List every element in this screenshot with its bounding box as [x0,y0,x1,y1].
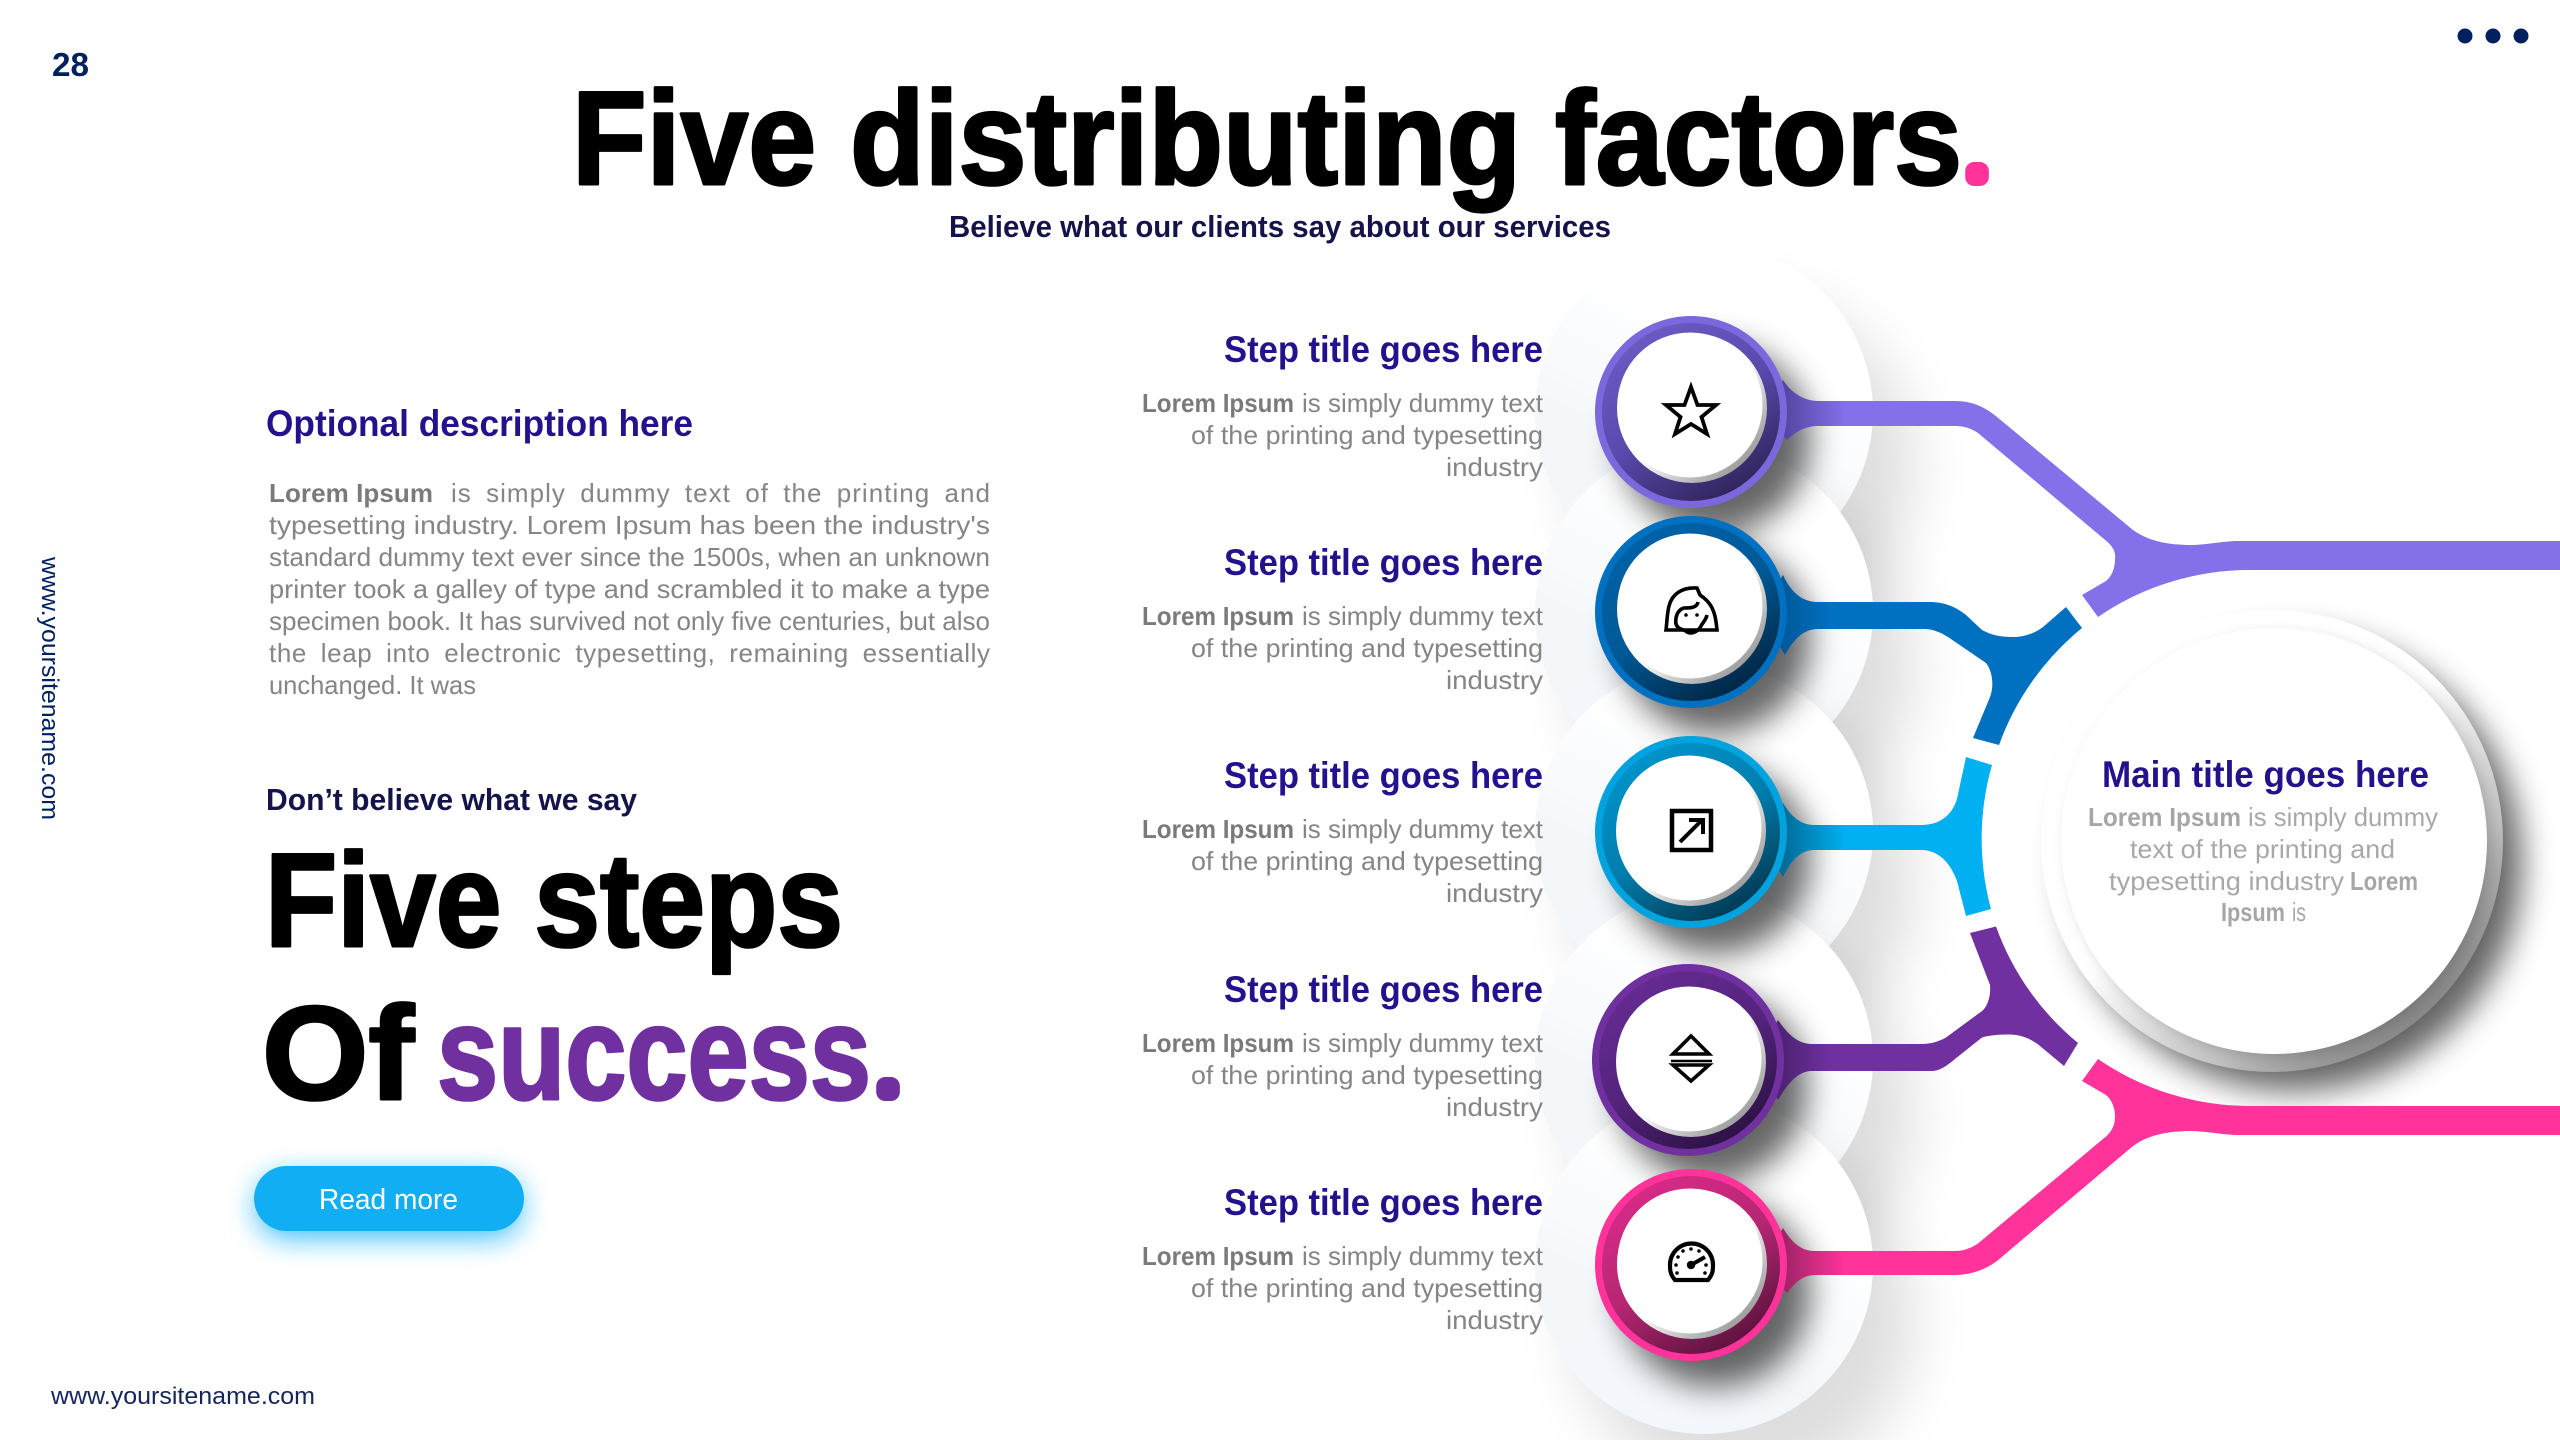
step text 5 [1142,1182,1544,1335]
step text 2: industry [1446,665,1543,695]
step text 3: of the printing and typesetting [1191,846,1543,876]
paragraph: unchanged. It was [269,670,476,700]
title: Five distributing factors [572,65,1962,213]
step text 1: industry [1446,452,1543,482]
icon: arrow in square [1672,811,1711,850]
step text 2: of the printing and typesetting [1191,633,1543,663]
step text 3: Lorem Ipsum [1142,814,1294,844]
step text 1: Lorem Ipsum [1142,388,1294,418]
paragraph: the leap into electronic typesetting, remaining essentially [269,638,990,668]
menu dots icon [2458,28,2528,44]
step text 3: industry [1446,878,1543,908]
heading: optional description: Optional description here [266,403,693,444]
icon: face [1666,588,1717,633]
page number: 28 [52,46,89,83]
central circle text: is simply dummy [2248,802,2438,832]
step text 4: Lorem Ipsum [1142,1028,1294,1058]
step text 1: Step title goes here [1224,329,1543,370]
step text 5: industry [1446,1305,1543,1335]
pale backing discs [1535,243,1913,1440]
ring 1: violet with star icon [1595,316,1787,508]
headline: of success: . [882,1057,894,1101]
step text 4: Step title goes here [1224,969,1543,1010]
central circle [2041,610,2522,1091]
paragraph: is simply dummy text of the printing and [451,478,990,508]
paragraph [269,478,990,700]
headline: five steps: Five steps [265,827,843,975]
step text 2 [1142,542,1544,695]
step text 4: of the printing and typesetting [1191,1060,1543,1090]
step text 4 [1142,969,1544,1122]
icon: sort arrows [1671,1036,1712,1081]
central circle text: text of the printing and [2130,834,2395,864]
step text 1 [1142,329,1544,482]
paragraph: typesetting industry. Lorem Ipsum has been the industry's [269,510,990,540]
central circle text: Main title goes here [2102,754,2429,795]
paragraph: printer took a galley of type and scrambled it to make a type [269,574,990,604]
icon: star [1666,387,1716,434]
headline: of success [262,980,894,1128]
step text 1: of the printing and typesetting [1191,420,1543,450]
ring drop shadows [1617,344,1810,1387]
button: read more [254,1166,524,1238]
connector: cyan [1760,757,1992,916]
footer site name: www.yoursitename.com [50,1383,315,1410]
headline: of success: Of [262,980,415,1128]
step text 2: Lorem Ipsum [1142,601,1294,631]
step text 3 [1142,755,1544,908]
subtitle: Believe what our clients say about our services [949,209,1611,244]
paragraph: specimen book. It has survived not only five centuries, but also [269,606,990,636]
central circle text: Lorem [2350,866,2418,896]
step text 5: Lorem Ipsum [1142,1241,1294,1271]
step text 5: Step title goes here [1224,1182,1543,1223]
ring 4: purple with sort icon [1592,964,1784,1156]
connector: blue [1760,575,2082,745]
step text 5: is simply dummy text [1302,1241,1544,1271]
ring 5: pink with gauge icon [1595,1169,1787,1361]
connector: violet [1760,380,2560,617]
step text 2: is simply dummy text [1302,601,1544,631]
central circle text: typesetting industry [2109,866,2344,896]
central circle text [2088,754,2438,927]
button: read more: Read more [319,1184,458,1216]
ring 2: blue with face icon [1595,516,1787,708]
central circle text: Lorem Ipsum [2088,802,2241,832]
title: . [1972,142,1983,186]
step text 1: is simply dummy text [1302,388,1544,418]
subheading: Don’t believe what we say [266,782,638,817]
icon: gauge [1670,1244,1713,1280]
headline: of success: success [437,980,871,1128]
central circle text: Ipsum [2221,897,2285,927]
paragraph: Lorem Ipsum [269,478,433,508]
vertical site name: www.yoursitename.com [36,556,63,820]
step text 4: industry [1446,1092,1543,1122]
paragraph: standard dummy text ever since the 1500s, when an unknown [269,542,990,572]
step text 2: Step title goes here [1224,542,1543,583]
step text 5: of the printing and typesetting [1191,1273,1543,1303]
connector: purple [1755,926,2078,1100]
step text 4: is simply dummy text [1302,1028,1544,1058]
step text 3: Step title goes here [1224,755,1543,796]
central circle text: is [2292,897,2306,927]
step text 3: is simply dummy text [1302,814,1544,844]
connector: pink [1760,1059,2560,1293]
ring 3: cyan with arrow icon [1595,736,1787,928]
